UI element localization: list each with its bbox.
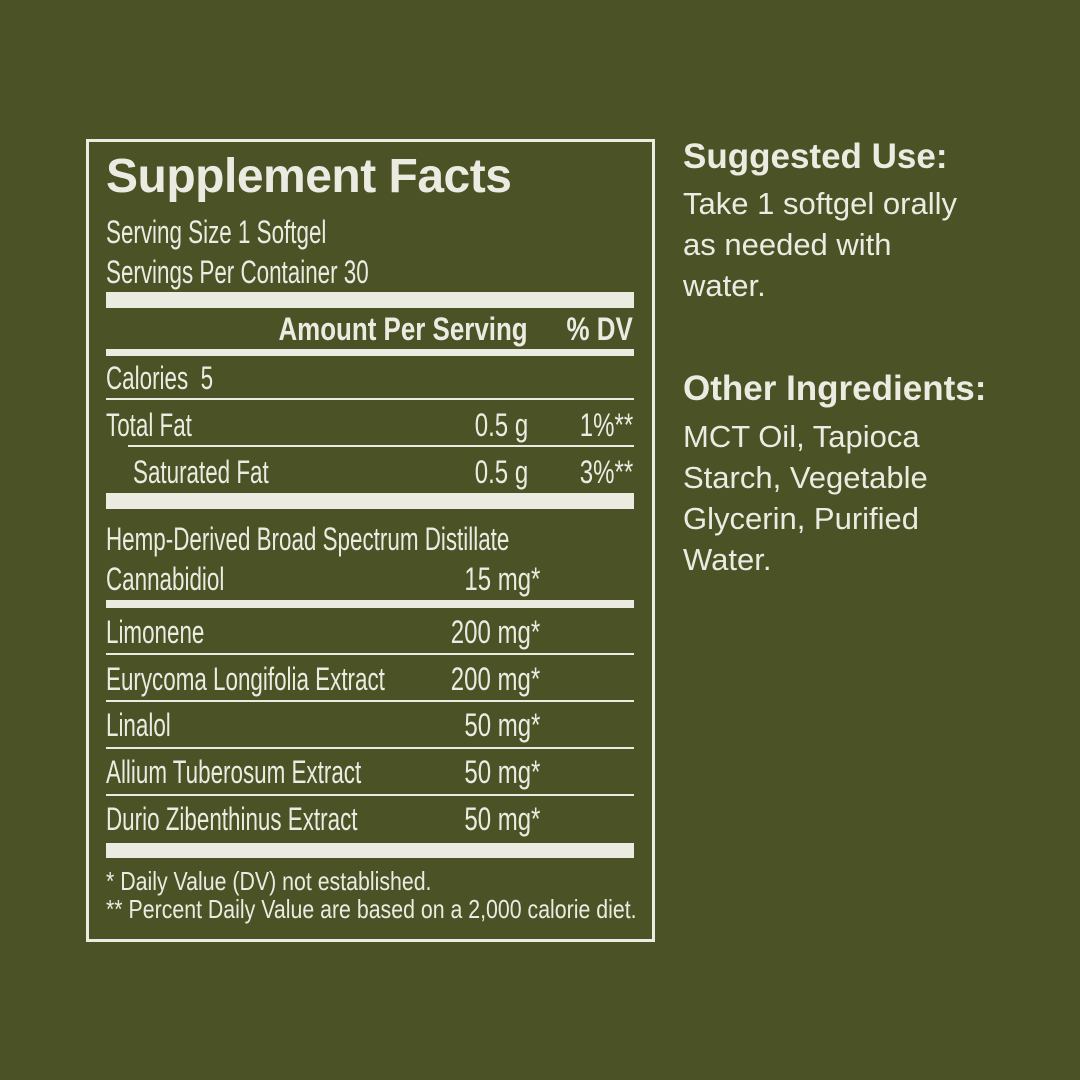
text: 200 mg*	[451, 661, 540, 697]
text: suggested use: as needed with	[683, 227, 892, 262]
text: other ingredients: Glycerin, Purified	[683, 501, 919, 536]
heading: other ingredients: Other Ingredients:	[683, 369, 986, 408]
text: suggested use: Take 1 softgel orally	[683, 186, 957, 221]
text: suggested use: water.	[683, 268, 766, 303]
text: 50 mg*	[464, 801, 540, 837]
row: allium: Allium Tuberosum Extract	[106, 754, 361, 790]
serving size: Serving Size 1 Softgel	[106, 214, 326, 250]
text: suggested use	[683, 186, 957, 303]
row: total fat: Total Fat	[106, 407, 192, 443]
text: other ingredients	[683, 419, 928, 577]
row: durio: Durio Zibenthinus Extract	[106, 801, 357, 837]
row: linalol: Linalol	[106, 707, 171, 743]
heading: suggested use: Suggested Use:	[683, 137, 948, 176]
text: 0.5 g	[475, 454, 528, 490]
text: 50 mg*	[464, 707, 540, 743]
row: hemp distillate: Hemp-Derived Broad Spectrum Distillate	[106, 521, 509, 557]
header: amount per serving: Amount Per Serving	[279, 311, 528, 347]
text: 1%**	[580, 407, 633, 443]
text: other ingredients: Water.	[683, 542, 771, 577]
row: calories: Calories 5	[106, 360, 213, 396]
footnote 1: * Daily Value (DV) not established.	[106, 866, 431, 896]
text: 15 mg*	[464, 561, 540, 597]
text: 0.5 g	[475, 407, 528, 443]
row: eurycoma: Eurycoma Longifolia Extract	[106, 661, 385, 697]
footnote 2: ** Percent Daily Value are based on a 2,000 calorie diet.	[106, 894, 637, 924]
row: saturated fat: Saturated Fat	[133, 454, 269, 490]
text: 200 mg*	[451, 614, 540, 650]
header: % DV: % DV	[567, 311, 633, 347]
servings per container: Servings Per Container 30	[106, 254, 369, 290]
text: 3%**	[580, 454, 633, 490]
row: cannabidiol: Cannabidiol	[106, 561, 224, 597]
title: Supplement Facts	[106, 150, 511, 203]
text: 50 mg*	[464, 754, 540, 790]
text: other ingredients: MCT Oil, Tapioca	[683, 419, 920, 454]
panel: supplement facts	[86, 139, 655, 942]
text: other ingredients: Starch, Vegetable	[683, 460, 928, 495]
row: limonene: Limonene	[106, 614, 204, 650]
